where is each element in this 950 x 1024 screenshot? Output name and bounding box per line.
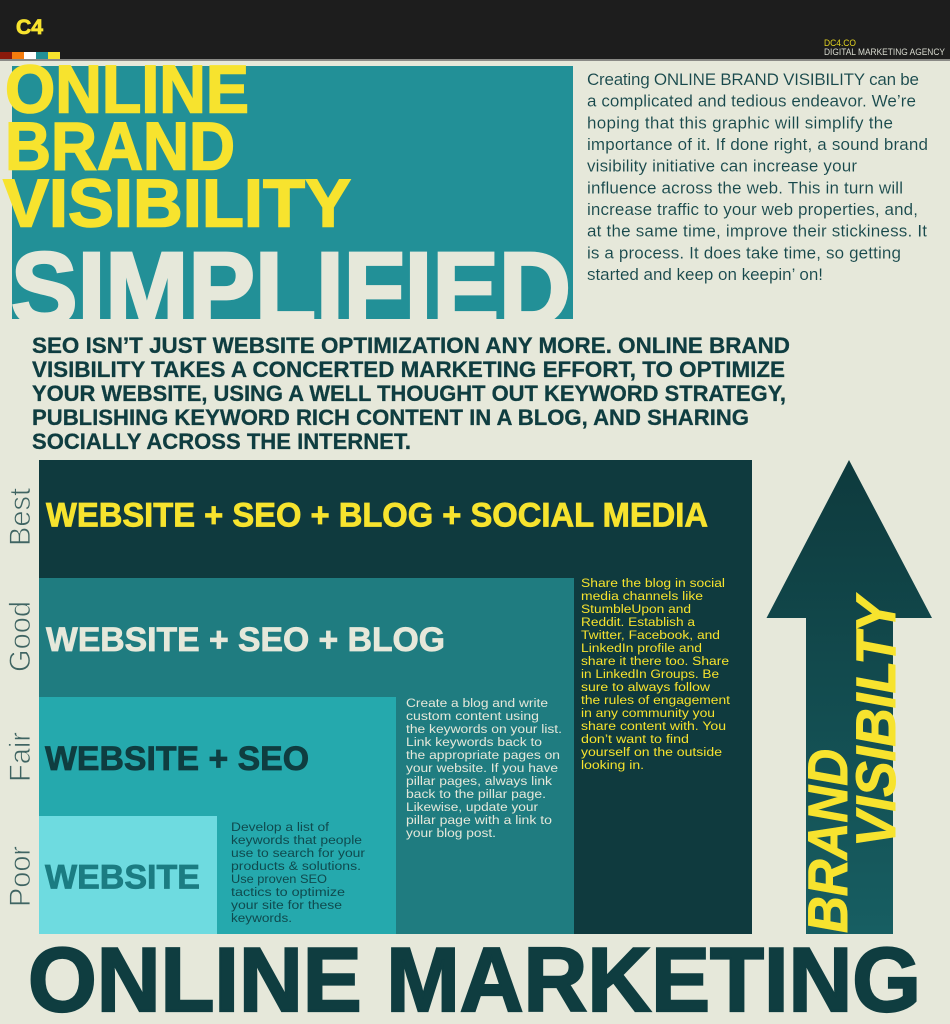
fair description: keywords that people bbox=[231, 833, 362, 847]
subheading: SEO ISN’T JUST WEBSITE OPTIMIZATION ANY MORE. ONLINE BRAND bbox=[32, 333, 790, 358]
best description: in LinkedIn Groups. Be bbox=[581, 667, 719, 681]
good description: pillar page with a link to bbox=[406, 813, 552, 827]
good description bbox=[406, 696, 562, 840]
best description: Reddit. Establish a bbox=[581, 615, 695, 629]
arrow label: BRAND bbox=[796, 749, 859, 933]
intro paragraph: influence across the web. This in turn will bbox=[587, 178, 903, 197]
intro paragraph: a complicated and tedious endeavor. We’re bbox=[587, 92, 916, 111]
title: online brand visibility: BRAND bbox=[5, 108, 235, 184]
good description: Link keywords back to bbox=[406, 735, 542, 749]
title: online brand visibility: VISIBILITY bbox=[3, 166, 351, 242]
best description: media channels like bbox=[581, 589, 703, 603]
best description: don’t want to find bbox=[581, 732, 689, 746]
subheading: VISIBILITY TAKES A CONCERTED MARKETING EFFORT, TO OPTIMIZE bbox=[32, 357, 785, 382]
logo: C4 bbox=[16, 16, 43, 39]
arrow label bbox=[796, 593, 907, 933]
good description: Create a blog and write bbox=[406, 696, 548, 710]
intro paragraph: at the same time, improve their stickiness. It bbox=[587, 222, 927, 241]
best description: LinkedIn profile and bbox=[581, 641, 702, 655]
scale labels: Good bbox=[4, 601, 37, 672]
good heading: WEBSITE + SEO + BLOG bbox=[46, 621, 445, 659]
title: simplified: SIMPLIFIED bbox=[11, 231, 571, 346]
tier: poor bbox=[39, 816, 217, 934]
title: online brand visibility bbox=[3, 52, 351, 242]
poor heading: WEBSITE bbox=[45, 858, 200, 896]
best description: Twitter, Facebook, and bbox=[581, 628, 720, 642]
fair description: your site for these bbox=[231, 898, 342, 912]
tier: good bbox=[39, 578, 574, 934]
agency tagline bbox=[824, 38, 945, 57]
best description bbox=[581, 576, 731, 772]
good description: the appropriate pages on bbox=[406, 748, 560, 762]
title: online brand visibility: ONLINE bbox=[5, 52, 249, 128]
best heading: WEBSITE + SEO + BLOG + SOCIAL MEDIA bbox=[46, 496, 708, 534]
best description: the rules of engagement bbox=[581, 693, 731, 707]
arrow label: VISIBILTY bbox=[844, 593, 907, 847]
title panel bbox=[2, 64, 573, 319]
subheading bbox=[32, 333, 790, 454]
subheading: PUBLISHING KEYWORD RICH CONTENT IN A BLOG, AND SHARING bbox=[32, 405, 749, 430]
good description: pillar pages, always link bbox=[406, 774, 553, 788]
best description: in any community you bbox=[581, 706, 715, 720]
best description: StumbleUpon and bbox=[581, 602, 691, 616]
good description: your website. If you have bbox=[406, 761, 558, 775]
fair description: products & solutions. bbox=[231, 859, 361, 873]
good description: the keywords on your list. bbox=[406, 722, 562, 736]
good description: back to the pillar page. bbox=[406, 787, 546, 801]
best description: sure to always follow bbox=[581, 680, 710, 694]
intro paragraph: visibility initiative can increase your bbox=[587, 157, 857, 176]
arrow bbox=[766, 460, 932, 934]
good description: custom content using bbox=[406, 709, 539, 723]
fair description: keywords. bbox=[231, 911, 292, 925]
scale labels bbox=[4, 487, 37, 907]
good description: your blog post. bbox=[406, 826, 496, 840]
subheading: YOUR WEBSITE, USING A WELL THOUGHT OUT KEYWORD STRATEGY, bbox=[32, 381, 786, 406]
best description: yourself on the outside bbox=[581, 745, 722, 759]
fair description: Use proven SEO bbox=[231, 872, 327, 886]
intro paragraph: hoping that this graphic will simplify the bbox=[587, 113, 893, 132]
fair description: tactics to optimize bbox=[231, 885, 345, 899]
best description: looking in. bbox=[581, 758, 644, 772]
intro paragraph: started and keep on keepin’ on! bbox=[587, 265, 823, 284]
intro paragraph bbox=[587, 70, 928, 284]
colour stripes bbox=[0, 52, 60, 59]
scale labels: Fair bbox=[4, 732, 37, 782]
intro paragraph: importance of it. If done right, a sound brand bbox=[587, 135, 928, 154]
subheading: SOCIALLY ACROSS THE INTERNET. bbox=[32, 429, 411, 454]
fair description: Develop a list of bbox=[231, 820, 330, 834]
tier: fair bbox=[39, 697, 396, 934]
best description: share content with. You bbox=[581, 719, 726, 733]
scale labels: Best bbox=[4, 487, 37, 546]
intro paragraph: is a process. It does take time, so getting bbox=[587, 243, 901, 262]
best description: share it there too. Share bbox=[581, 654, 729, 668]
fair description: use to search for your bbox=[231, 846, 365, 860]
header bar bbox=[0, 0, 950, 61]
good description: Likewise, update your bbox=[406, 800, 538, 814]
best description: Share the blog in social bbox=[581, 576, 725, 590]
scale labels: Poor bbox=[4, 846, 37, 907]
fair heading: WEBSITE + SEO bbox=[45, 740, 309, 778]
intro paragraph: Creating ONLINE BRAND VISIBILITY can be bbox=[587, 70, 919, 89]
intro paragraph: increase traffic to your web properties, and, bbox=[587, 200, 918, 219]
fair description bbox=[231, 820, 365, 925]
agency tagline: DC4.CO bbox=[824, 38, 856, 48]
tier: best bbox=[39, 460, 752, 934]
